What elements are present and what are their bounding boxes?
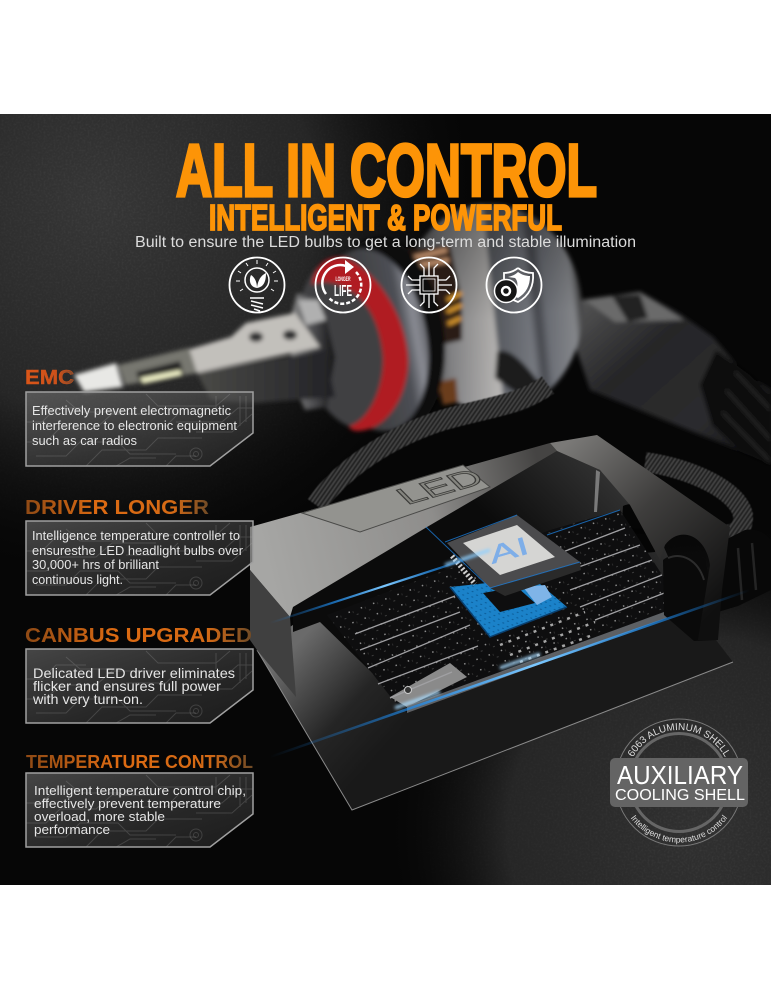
body text: EMC: interference to electronic equipment <box>32 418 237 433</box>
heading: canbus upgraded: CANBUS UPGRADED <box>25 624 252 647</box>
inner ring <box>283 249 417 439</box>
badge: auxiliary cooling shell <box>610 718 748 846</box>
blue light streaks <box>270 510 750 757</box>
body text: temperature control: Intelligent temperature control chip, <box>34 783 246 798</box>
body text: temperature control <box>34 783 246 837</box>
red seal ring <box>312 257 408 431</box>
braided cable right <box>645 462 743 536</box>
base plate <box>257 520 733 810</box>
body text: temperature control: overload, more stable <box>34 809 165 824</box>
body text: EMC: Effectively prevent electromagnetic <box>32 403 232 418</box>
LED label plate: LED <box>389 464 491 510</box>
braided cable upper <box>316 385 548 505</box>
panel: EMC <box>25 366 253 466</box>
copper winding <box>408 245 462 405</box>
icon: longer life: LONGER <box>336 277 351 283</box>
heading: driver longer: DRIVER LONGER <box>25 496 209 519</box>
bulb base <box>290 293 335 410</box>
top shell silver <box>250 443 557 617</box>
body text: temperature control: effectively prevent temperature <box>34 796 221 811</box>
metal rear disc <box>392 195 592 421</box>
heading: EMC: EMC <box>25 366 74 389</box>
circuit board <box>327 510 683 713</box>
bulb base highlight <box>298 300 326 325</box>
black band <box>319 230 457 440</box>
panel: driver longer <box>25 496 253 595</box>
infographic canvas <box>0 114 771 885</box>
body text: canbus upgraded <box>32 665 235 707</box>
blue heat sink <box>450 578 567 637</box>
panel: temperature control <box>26 752 253 847</box>
body text: canbus upgraded: Delicated LED driver eliminates <box>33 665 235 681</box>
black front connector <box>663 554 718 641</box>
LED bulb illustration <box>74 195 771 465</box>
card: canbus upgraded <box>26 649 253 723</box>
badge: auxiliary cooling shell: AUXILIARY <box>617 760 743 790</box>
badge: auxiliary cooling shell: Intelligent temperature control <box>631 814 728 844</box>
icon: longer life: LIFE <box>334 283 352 300</box>
silver solder pad <box>390 663 467 707</box>
silver collar <box>304 240 442 440</box>
inner post <box>594 470 600 512</box>
icon: longer life <box>316 258 370 312</box>
body text: EMC <box>32 403 237 448</box>
tagline: Built to ensure the LED bulbs to get a long-term and stable illumination <box>135 234 636 251</box>
body text: driver longer: 30,000+ hrs of brilliant <box>32 557 159 572</box>
body text: EMC: such as car radios <box>32 433 137 448</box>
icon: eco bulb <box>230 258 284 312</box>
body text: temperature control: performance <box>34 822 110 837</box>
card: temperature control <box>26 773 253 847</box>
shell interior <box>293 451 690 700</box>
subtitle heading: INTELLIGENT & POWERFUL <box>209 197 562 238</box>
body text: driver longer: ensuresthe LED headlight bulbs over <box>32 543 244 558</box>
LED label plate <box>302 464 491 532</box>
panel: canbus upgraded <box>25 624 253 723</box>
badge: auxiliary cooling shell: 6063 ALUMINUM SHELL <box>628 723 729 757</box>
bulb arm <box>74 313 335 403</box>
shell right arm <box>550 435 730 640</box>
badge: auxiliary cooling shell: COOLING SHELL <box>615 787 745 804</box>
heading: temperature control: TEMPERATURE CONTROL <box>26 752 253 772</box>
icon: chip <box>402 258 456 312</box>
body text: driver longer: Intelligence temperature controller to <box>32 528 240 543</box>
rear connector <box>613 504 771 612</box>
plug connector <box>575 292 771 465</box>
body text: canbus upgraded: flicker and ensures full power <box>33 678 221 694</box>
background panel <box>0 114 771 885</box>
body text: driver longer <box>32 528 244 587</box>
control module <box>250 435 771 810</box>
AI chip <box>447 515 581 596</box>
icon: shield gear <box>486 258 542 312</box>
left shell leg <box>250 570 296 697</box>
card: EMC <box>26 392 253 466</box>
body text: canbus upgraded: with very turn-on. <box>32 691 143 707</box>
card: driver longer <box>26 521 253 595</box>
body text: driver longer: continuous light. <box>32 572 123 587</box>
AI chip: AI <box>486 532 532 570</box>
